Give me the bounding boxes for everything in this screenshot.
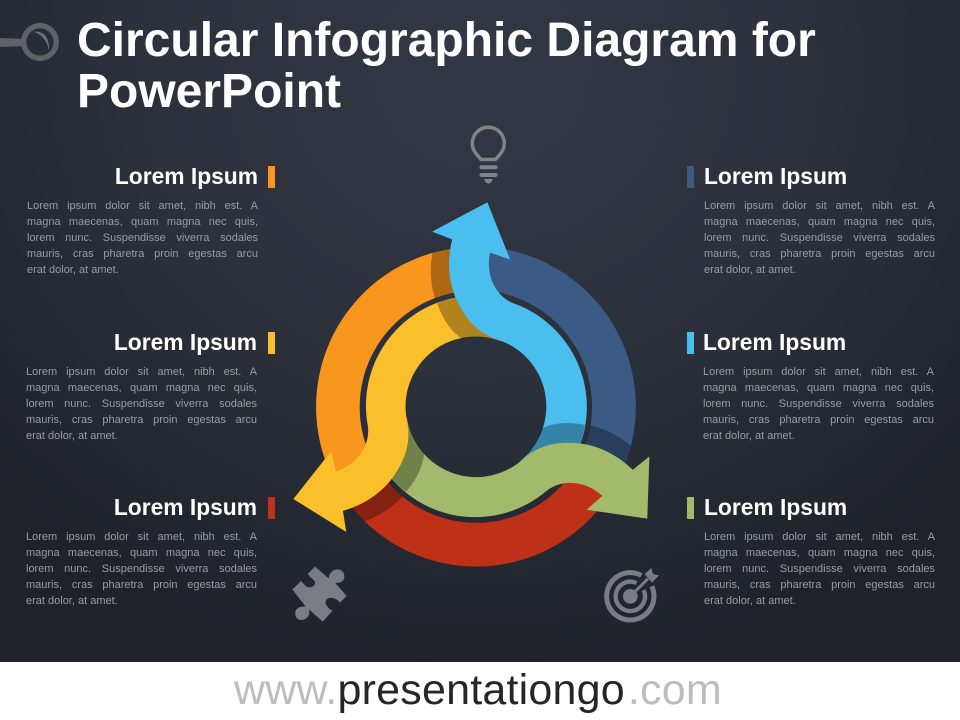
- text block: [704, 200, 935, 276]
- panel: left 2 yellow: [26, 329, 275, 442]
- panel: left 3 red: [26, 494, 275, 607]
- heading: Lorem Ipsum: [704, 163, 847, 189]
- accent bar: [687, 332, 694, 354]
- panel: right 3 green: [687, 494, 935, 607]
- text block: [27, 200, 258, 276]
- title: Circular Infographic Diagram for: [77, 14, 816, 67]
- icon: light bulb: [472, 127, 504, 184]
- text block: magna maecenas, quam magna nec quis,: [27, 216, 258, 228]
- text block: Lorem ipsum dolor sit amet, nibh est. A: [704, 200, 935, 212]
- heading: Lorem Ipsum: [114, 494, 257, 520]
- footer website band: www.presentationgo.com: [234, 666, 722, 714]
- text block: Lorem ipsum dolor sit amet, nibh est. A: [27, 200, 258, 212]
- text block: magna maecenas, quam magna nec quis,: [703, 382, 934, 394]
- accent bar: [687, 166, 694, 188]
- accent bar: [268, 497, 275, 519]
- text block: mauris, cras pharetra proin egestas arcu: [26, 579, 257, 591]
- panel: right 2 light blue: [687, 329, 934, 442]
- arrow: light blue: [432, 202, 591, 484]
- text block: lorem nunc. Suspendisse viverra sodales: [704, 563, 935, 575]
- text block: lorem nunc. Suspendisse viverra sodales: [27, 232, 258, 244]
- text block: mauris, cras pharetra proin egestas arcu: [26, 414, 257, 426]
- outer band: red: [343, 379, 611, 624]
- text block: lorem nunc. Suspendisse viverra sodales: [26, 398, 257, 410]
- text block: mauris, cras pharetra proin egestas arcu: [27, 248, 258, 260]
- text block: magna maecenas, quam magna nec quis,: [26, 547, 257, 559]
- text block: [703, 366, 934, 442]
- text block: [26, 366, 257, 442]
- accent bar: [268, 332, 275, 354]
- heading: Lorem Ipsum: [115, 163, 258, 189]
- outer band: orange: [259, 237, 527, 483]
- arrow: green: [352, 330, 675, 609]
- text block: magna maecenas, quam magna nec quis,: [704, 547, 935, 559]
- text block: magna maecenas, quam magna nec quis,: [704, 216, 935, 228]
- text block: erat dolor, at amet.: [703, 430, 795, 442]
- text block: [26, 531, 257, 607]
- text block: erat dolor, at amet.: [704, 264, 796, 276]
- text block: Lorem ipsum dolor sit amet, nibh est. A: [26, 366, 257, 378]
- text block: erat dolor, at amet.: [704, 595, 796, 607]
- icon: target with arrow: [607, 568, 659, 620]
- text block: mauris, cras pharetra proin egestas arcu: [704, 579, 935, 591]
- title: [77, 14, 816, 118]
- accent bar: [268, 166, 275, 188]
- text block: mauris, cras pharetra proin egestas arcu: [704, 248, 935, 260]
- heading: Lorem Ipsum: [703, 329, 846, 355]
- text block: erat dolor, at amet.: [26, 430, 118, 442]
- heading: Lorem Ipsum: [704, 494, 847, 520]
- outer band: dark blue: [480, 248, 636, 468]
- title: PowerPoint: [77, 65, 341, 118]
- panel: right 1 dark blue: [687, 163, 935, 276]
- text block: lorem nunc. Suspendisse viverra sodales: [703, 398, 934, 410]
- arrow: light blue head overlapping yellow: [432, 202, 547, 340]
- text block: erat dolor, at amet.: [27, 264, 119, 276]
- text block: Lorem ipsum dolor sit amet, nibh est. A: [704, 531, 935, 543]
- text block: [704, 531, 935, 607]
- text block: mauris, cras pharetra proin egestas arcu: [703, 414, 934, 426]
- text block: lorem nunc. Suspendisse viverra sodales: [26, 563, 257, 575]
- text block: Lorem ipsum dolor sit amet, nibh est. A: [703, 366, 934, 378]
- text block: magna maecenas, quam magna nec quis,: [26, 382, 257, 394]
- text block: Lorem ipsum dolor sit amet, nibh est. A: [26, 531, 257, 543]
- text block: lorem nunc. Suspendisse viverra sodales: [704, 232, 935, 244]
- icon: logo ring: [0, 26, 56, 58]
- circular arrow diagram: [294, 202, 650, 622]
- arrow: yellow: [241, 268, 565, 547]
- heading: Lorem Ipsum: [114, 329, 257, 355]
- accent bar: [687, 497, 694, 519]
- footer website band: [0, 662, 960, 720]
- panel: left 1 orange: [27, 163, 275, 276]
- text block: erat dolor, at amet.: [26, 595, 118, 607]
- icon: puzzle piece: [292, 567, 347, 622]
